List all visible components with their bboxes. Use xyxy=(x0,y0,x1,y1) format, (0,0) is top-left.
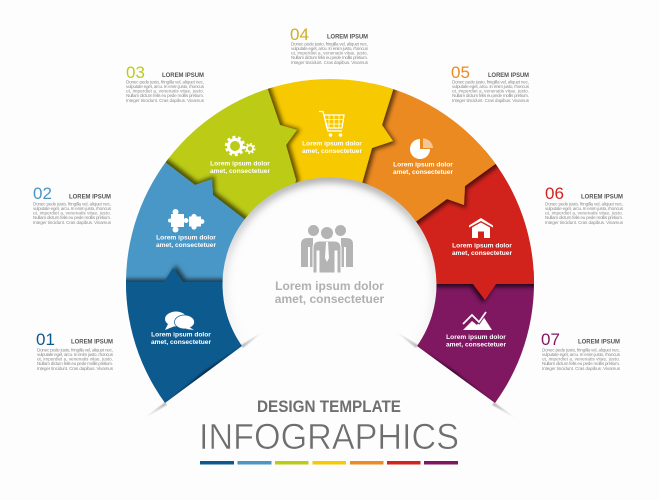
label 03: Lorem ipsum dolor xyxy=(210,160,270,168)
label 06: Lorem ipsum dolor xyxy=(452,242,512,250)
label 03 xyxy=(210,160,270,175)
label 04: amet, consectetuer xyxy=(302,148,362,155)
text block 03: 03 xyxy=(126,63,145,82)
label 01: Lorem ipsum dolor xyxy=(151,332,211,338)
segment 02 light blue xyxy=(126,157,249,300)
text block 05: 05 xyxy=(451,63,470,82)
text block 07: Nullam dictum felis eu pede mollis pretium. xyxy=(542,361,620,366)
label 01: amet, consectetuer xyxy=(151,339,211,346)
text block 05: vulputate eget, arcu. In enim justo, rhoncus xyxy=(452,84,530,89)
text block 03: ut, imperdiet a, venenatis vitae, justo. xyxy=(126,89,204,94)
segment 01 dark blue xyxy=(126,264,242,403)
text block 01: LOREM IPSUM xyxy=(71,338,113,346)
text block 02: Integer tincidunt. Cras dapibus. Vivamus xyxy=(33,220,112,225)
text block 02: Nullam dictum felis eu pede mollis pretium. xyxy=(33,215,111,220)
semicircular ring of seven segments xyxy=(126,79,534,403)
text block 06: Nullam dictum felis eu pede mollis pretium. xyxy=(545,215,623,220)
text block 07: Donec pede justo, fringilla vel, aliquet nec, xyxy=(542,348,620,352)
label 07 xyxy=(446,334,506,348)
bottom edge shadow left xyxy=(170,348,238,400)
colour legend bars xyxy=(200,461,458,464)
text block 04: 04 xyxy=(290,25,309,44)
text block 05: Integer tincidunt. Cras dapibus. Vivamus xyxy=(452,98,530,103)
text block 02: vulputate eget, arcu. In enim justo, rhoncus xyxy=(33,206,112,211)
text block 01: ut, imperdiet a, venenatis vitae, justo. xyxy=(37,357,113,362)
icon: shopping cart xyxy=(319,112,344,137)
segment 03 green xyxy=(158,87,302,230)
text block 02: ut, imperdiet a, venenatis vitae, justo. xyxy=(33,211,111,216)
center caption: amet, consectetuer xyxy=(275,292,385,306)
label 05: amet, consectetuer xyxy=(393,169,453,176)
text block 01: Donec pede justo, fringilla vel, aliquet nec, xyxy=(37,348,113,352)
text block 04: Nullam dictum felis eu pede mollis pretium. xyxy=(291,55,368,60)
text block 04: vulputate eget, arcu. In enim justo, rhoncus xyxy=(291,46,369,51)
text block 07: LOREM IPSUM xyxy=(578,338,620,346)
bottom edge shadow right xyxy=(422,350,489,398)
text block 05: ut, imperdiet a, venenatis vitae, justo. xyxy=(452,89,529,94)
label 05: Lorem ipsum dolor xyxy=(393,162,453,168)
text block 06: 06 xyxy=(545,184,564,203)
center caption: Lorem ipsum dolor xyxy=(275,279,384,293)
text block 04 xyxy=(290,25,369,65)
segment 06 red xyxy=(412,150,534,304)
label 07: amet, consectetuer xyxy=(446,342,506,348)
icon: gears xyxy=(226,137,255,155)
text block 04: LOREM IPSUM xyxy=(327,34,368,40)
icon: house xyxy=(469,218,493,238)
text block 04: Integer tincidunt. Cras dapibus. Vivamus xyxy=(291,60,369,65)
inner circle shadow xyxy=(222,177,436,314)
text block 06: ut, imperdiet a, venenatis vitae, justo. xyxy=(545,211,623,216)
label 06 xyxy=(452,242,512,257)
segment 04 yellow xyxy=(261,79,400,188)
text block 03: vulputate eget, arcu. In enim justo, rhoncus xyxy=(126,84,205,89)
label 02: amet, consectetuer xyxy=(156,242,216,249)
title: infographics: INFOGRAPHICS xyxy=(199,416,459,457)
text block 06: Donec pede justo, fringilla vel, aliquet nec, xyxy=(545,202,623,206)
text block 01: Integer tincidunt. Cras dapibus. Vivamus xyxy=(37,366,114,371)
label 03: amet, consectetuer xyxy=(210,168,270,175)
segment 05 orange xyxy=(351,83,499,227)
text block 05: LOREM IPSUM xyxy=(488,72,529,79)
text block 03 xyxy=(126,63,205,103)
text block 06: vulputate eget, arcu. In enim justo, rhoncus xyxy=(545,206,624,211)
text block 07: Integer tincidunt. Cras dapibus. Vivamus xyxy=(542,366,621,371)
icon: mountain chart xyxy=(463,312,492,330)
text block 02 xyxy=(33,184,112,225)
label 04 xyxy=(302,140,362,155)
text block 02: 02 xyxy=(33,184,52,203)
label 04: Lorem ipsum dolor xyxy=(302,140,362,148)
text block 06 xyxy=(545,184,624,225)
text block 02: Donec pede justo, fringilla vel, aliquet nec, xyxy=(33,202,111,206)
text block 07: ut, imperdiet a, venenatis vitae, justo. xyxy=(542,357,620,362)
text block 03: LOREM IPSUM xyxy=(162,72,204,79)
center caption xyxy=(275,279,385,306)
text block 05: Nullam dictum felis eu pede mollis pretium. xyxy=(452,93,529,98)
text block 01: vulputate eget, arcu. In enim justo, rhoncus xyxy=(37,352,114,357)
text block 03: Nullam dictum felis eu pede mollis pretium. xyxy=(126,93,204,98)
text block 04: ut, imperdiet a, venenatis vitae, justo. xyxy=(291,51,368,56)
icon: pie chart xyxy=(410,138,433,159)
text block 05: Donec pede justo, fringilla vel, aliquet nec, xyxy=(452,80,529,84)
text block 06: LOREM IPSUM xyxy=(581,194,623,200)
title: design template: DESIGN TEMPLATE xyxy=(257,398,401,416)
text block 07 xyxy=(541,330,621,371)
text block 05 xyxy=(451,63,530,103)
text block 03: Donec pede justo, fringilla vel, aliquet nec, xyxy=(126,80,204,84)
icon: business people xyxy=(301,225,353,273)
fold shadows at sector ends xyxy=(143,331,517,419)
label 01 xyxy=(151,332,211,346)
text block 07: 07 xyxy=(541,330,560,349)
text block 01: 01 xyxy=(36,330,55,349)
segment 07 purple xyxy=(417,270,534,403)
text block 06: Integer tincidunt. Cras dapibus. Vivamus xyxy=(545,220,624,225)
text block 07: vulputate eget, arcu. In enim justo, rhoncus xyxy=(542,352,621,357)
text block 01: Nullam dictum felis eu pede mollis pretium. xyxy=(37,361,113,366)
icon: puzzle pieces xyxy=(168,209,204,232)
text block 04: Donec pede justo, fringilla vel, aliquet nec, xyxy=(291,42,368,46)
label 02: Lorem ipsum dolor xyxy=(156,234,216,242)
text block 01 xyxy=(36,330,114,371)
label 05 xyxy=(393,162,453,176)
label 07: Lorem ipsum dolor xyxy=(446,334,506,341)
label 02 xyxy=(156,234,216,249)
text block 03: Integer tincidunt. Cras dapibus. Vivamus xyxy=(126,98,205,103)
text block 02: LOREM IPSUM xyxy=(69,194,111,200)
icon: speech bubbles xyxy=(165,312,194,330)
label 06: amet, consectetuer xyxy=(452,250,512,257)
